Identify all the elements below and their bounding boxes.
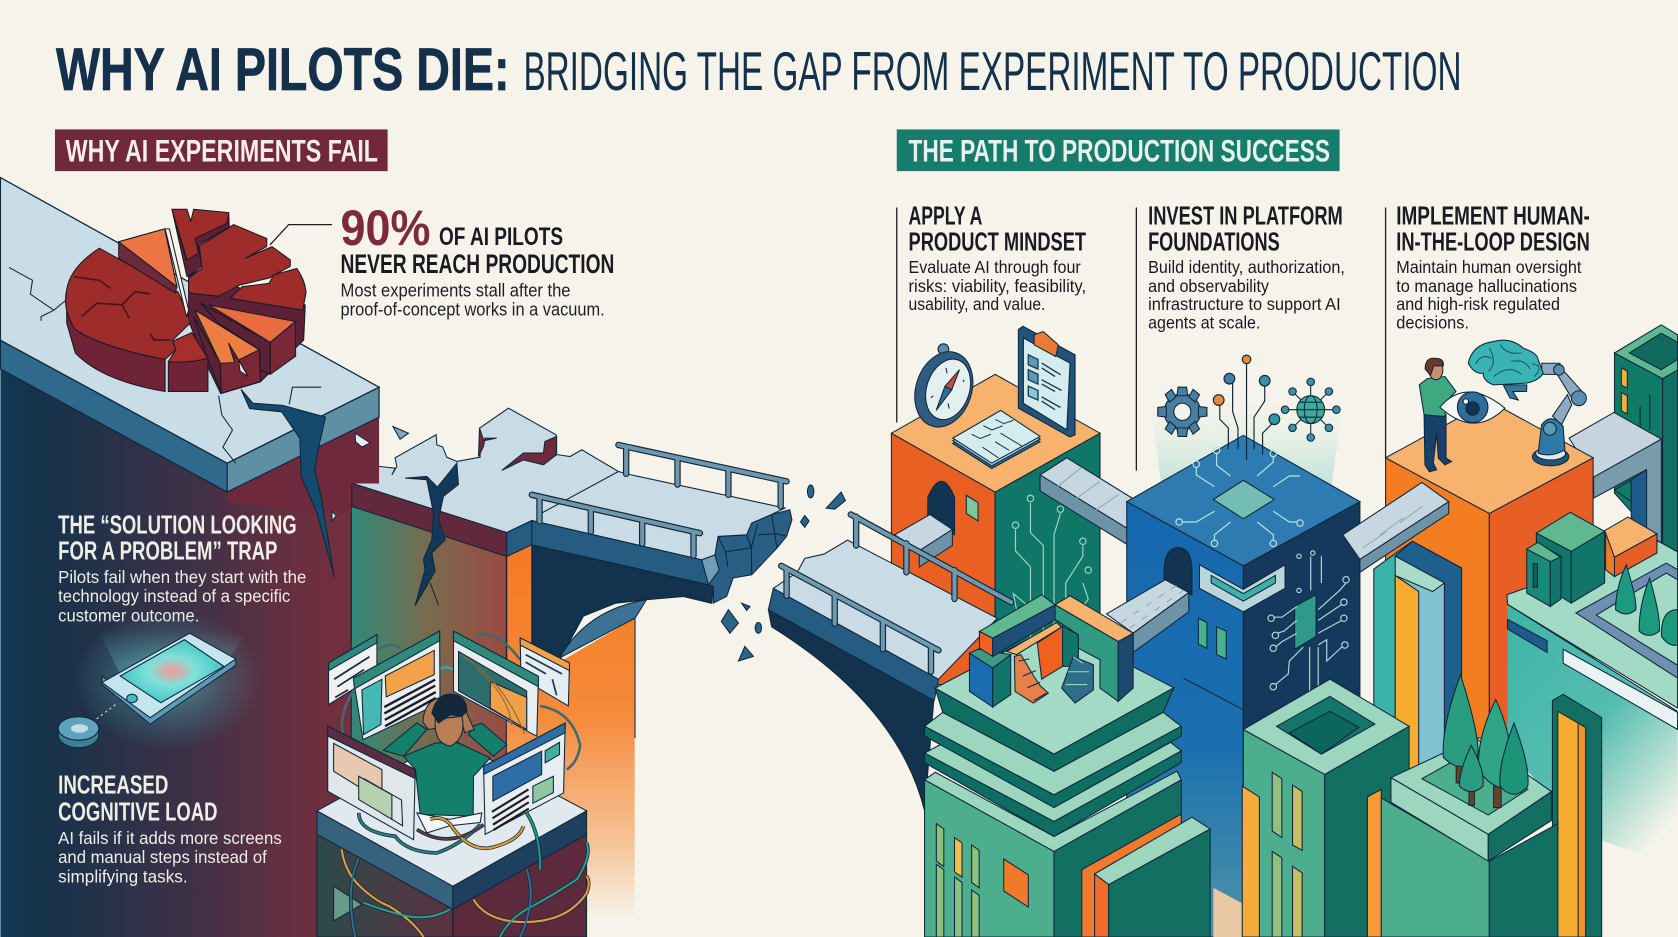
broken bridge deck: right <box>768 540 997 701</box>
text block: solution looking for a problem: customer outcome. <box>58 605 199 625</box>
arch doorway <box>928 481 955 535</box>
text block: increased cognitive load <box>58 772 282 886</box>
text block: increased cognitive load: INCREASED <box>58 772 168 800</box>
icon: person <box>1419 358 1456 472</box>
column text: apply a product mindset <box>897 203 1086 423</box>
walkway: platform tower to human tower <box>1343 482 1449 572</box>
column text: apply a product mindset: APPLY A <box>909 203 982 231</box>
text block: solution looking for a problem: Pilots fail when they start with the <box>58 567 306 587</box>
icon: eye <box>1440 392 1505 423</box>
cables under desk <box>342 843 589 937</box>
desk <box>317 738 587 909</box>
callout leader: pie chart to stat <box>270 225 332 245</box>
front green tower with stacked roofs <box>925 626 1210 937</box>
stat: 90 percent of AI pilots: 90% <box>341 199 430 256</box>
teal platform and garden <box>1507 541 1678 866</box>
section heading: why AI experiments fail: WHY AI EXPERIMENTS FAIL <box>66 134 378 169</box>
tower windows <box>936 824 1028 937</box>
section heading: path to production success: THE PATH TO PRODUCTION SUCCESS <box>909 134 1330 169</box>
desk column <box>317 832 587 937</box>
icon: robot arm <box>1532 363 1586 466</box>
roof layer 2 <box>925 712 1181 795</box>
section heading: why AI experiments fail <box>55 129 388 171</box>
title <box>56 36 1462 103</box>
stat: 90 percent of AI pilots: NEVER REACH PRODUCTION <box>341 249 614 279</box>
stat: 90 percent of AI pilots: OF AI PILOTS <box>439 223 563 251</box>
implement human tower <box>1386 401 1593 738</box>
walkway: blue tower lower <box>1106 580 1189 652</box>
platform foundation tower <box>1127 435 1360 937</box>
column text: invest in platform foundations: FOUNDATIONS <box>1148 228 1280 256</box>
column text: invest in platform foundations: and observability <box>1148 276 1269 296</box>
column text: invest in platform foundations: agents at scale. <box>1148 312 1260 332</box>
back cables <box>342 634 580 770</box>
title: WHY AI PILOTS DIE: <box>56 36 510 103</box>
icon: circuit tree <box>1213 355 1280 460</box>
text block: solution looking for a problem: technology instead of a specific <box>58 586 290 606</box>
front monitors <box>328 723 565 840</box>
stump crack <box>405 463 458 606</box>
blue tower windows <box>1198 618 1207 648</box>
stat: 90 percent of AI pilots: Most experiments stall after the <box>341 280 571 300</box>
column text: invest in platform foundations: INVEST IN PLATFORM <box>1148 203 1343 231</box>
text block: increased cognitive load: simplifying tasks. <box>58 866 188 886</box>
roof layer 3 <box>925 742 1181 821</box>
trees <box>1443 675 1528 808</box>
circuit traces on tower <box>1012 495 1091 642</box>
column text: invest in platform foundations <box>1136 203 1345 471</box>
papers on desk <box>417 813 482 833</box>
chip on platform top <box>1213 480 1274 519</box>
upper right tower and gray bridge <box>1569 325 1678 556</box>
icon: AI brain <box>1468 340 1543 400</box>
bridge railings: left <box>532 445 787 556</box>
desk cables outline <box>359 813 540 870</box>
desk cables colour <box>359 813 540 870</box>
roof band 2 <box>925 726 1181 808</box>
tower body <box>925 780 1054 937</box>
roof layer 4 <box>925 771 1181 851</box>
column text: invest in platform foundations: infrastructure to support AI <box>1148 294 1341 314</box>
text block: increased cognitive load: AI fails if it adds more screens <box>58 828 282 848</box>
small garden trees <box>1616 565 1678 645</box>
column text: implement human-in-the-loop design <box>1386 203 1590 458</box>
stat: 90 percent of AI pilots: proof-of-concept works in a vacuum. <box>341 300 605 320</box>
column text: implement human-in-the-loop design: decisions. <box>1396 312 1469 332</box>
bridge railings: right <box>781 514 1011 672</box>
text block: solution looking for a problem: FOR A PROBLEM” TRAP <box>58 537 277 565</box>
roof band 1 <box>935 688 1174 771</box>
walkway: deck to product tower <box>895 514 952 567</box>
corner notch <box>1199 565 1285 612</box>
orange side strip and block <box>1082 814 1210 937</box>
small window <box>966 495 978 521</box>
tree tower <box>1381 694 1602 937</box>
icon: clipboard checklist <box>1018 326 1075 437</box>
bridge underside: right <box>768 610 934 811</box>
hollow top tower <box>1242 679 1409 937</box>
text block: increased cognitive load: COGNITIVE LOAD <box>58 798 218 826</box>
walkway: product tower to platform tower <box>1040 458 1153 546</box>
roof band 3 <box>925 751 1181 836</box>
overloaded worker at desk <box>317 631 589 937</box>
text block: solution looking for a problem: THE “SOLUTION LOOKING <box>58 512 297 540</box>
icon: network globe <box>1281 378 1340 441</box>
cable colours under desk <box>342 843 589 937</box>
column text: implement human-in-the-loop design: Maintain human oversight <box>1396 257 1581 277</box>
bridge underside arch <box>532 544 713 660</box>
back monitors <box>329 631 569 740</box>
rooftop maze on front tower <box>969 595 1133 707</box>
pie chart: 90 percent <box>66 209 306 394</box>
icon: document stack <box>953 410 1040 468</box>
platform glow beam <box>1147 385 1346 503</box>
column text: implement human-in-the-loop design: IN-THE-LOOP DESIGN <box>1396 228 1590 256</box>
column text: apply a product mindset: risks: viability, feasibility, <box>909 276 1086 296</box>
top platform <box>935 626 1174 754</box>
column text: apply a product mindset: Evaluate AI through four <box>909 257 1081 277</box>
slab cracks <box>9 267 370 577</box>
text block: increased cognitive load: and manual steps instead of <box>58 847 267 867</box>
broken bridge: left stump wall <box>351 483 507 845</box>
section heading: path to production success <box>897 129 1340 171</box>
stressed person <box>383 694 507 816</box>
icon: compass <box>905 344 982 435</box>
column text: implement human-in-the-loop design: to manage hallucinations <box>1396 276 1577 296</box>
arch doorway on blue tower <box>1164 548 1192 595</box>
column text: implement human-in-the-loop design: IMPLEMENT HUMAN- <box>1396 203 1590 231</box>
top cliff slab <box>0 178 379 513</box>
slim teal and amber building <box>1374 541 1462 920</box>
fading orange pillar <box>506 544 635 931</box>
product mindset tower <box>891 374 1100 685</box>
left cliff wall <box>0 353 379 937</box>
icon: gear <box>1158 387 1207 436</box>
column text: apply a product mindset: PRODUCT MINDSET <box>909 228 1086 256</box>
column text: invest in platform foundations: Build identity, authorization, <box>1148 257 1345 277</box>
garden blocks <box>1527 512 1657 606</box>
text block: solution looking for a problem <box>58 512 306 625</box>
debris chips <box>721 485 845 661</box>
broken bridge deck: left <box>352 408 792 603</box>
stat: 90 percent of AI pilots <box>341 199 614 320</box>
icon: glowing phone <box>58 609 262 750</box>
chip on blue tower wall <box>1295 595 1316 649</box>
column text: apply a product mindset: usability, and value. <box>909 294 1045 314</box>
column text: implement human-in-the-loop design: and high-risk regulated <box>1396 294 1560 314</box>
